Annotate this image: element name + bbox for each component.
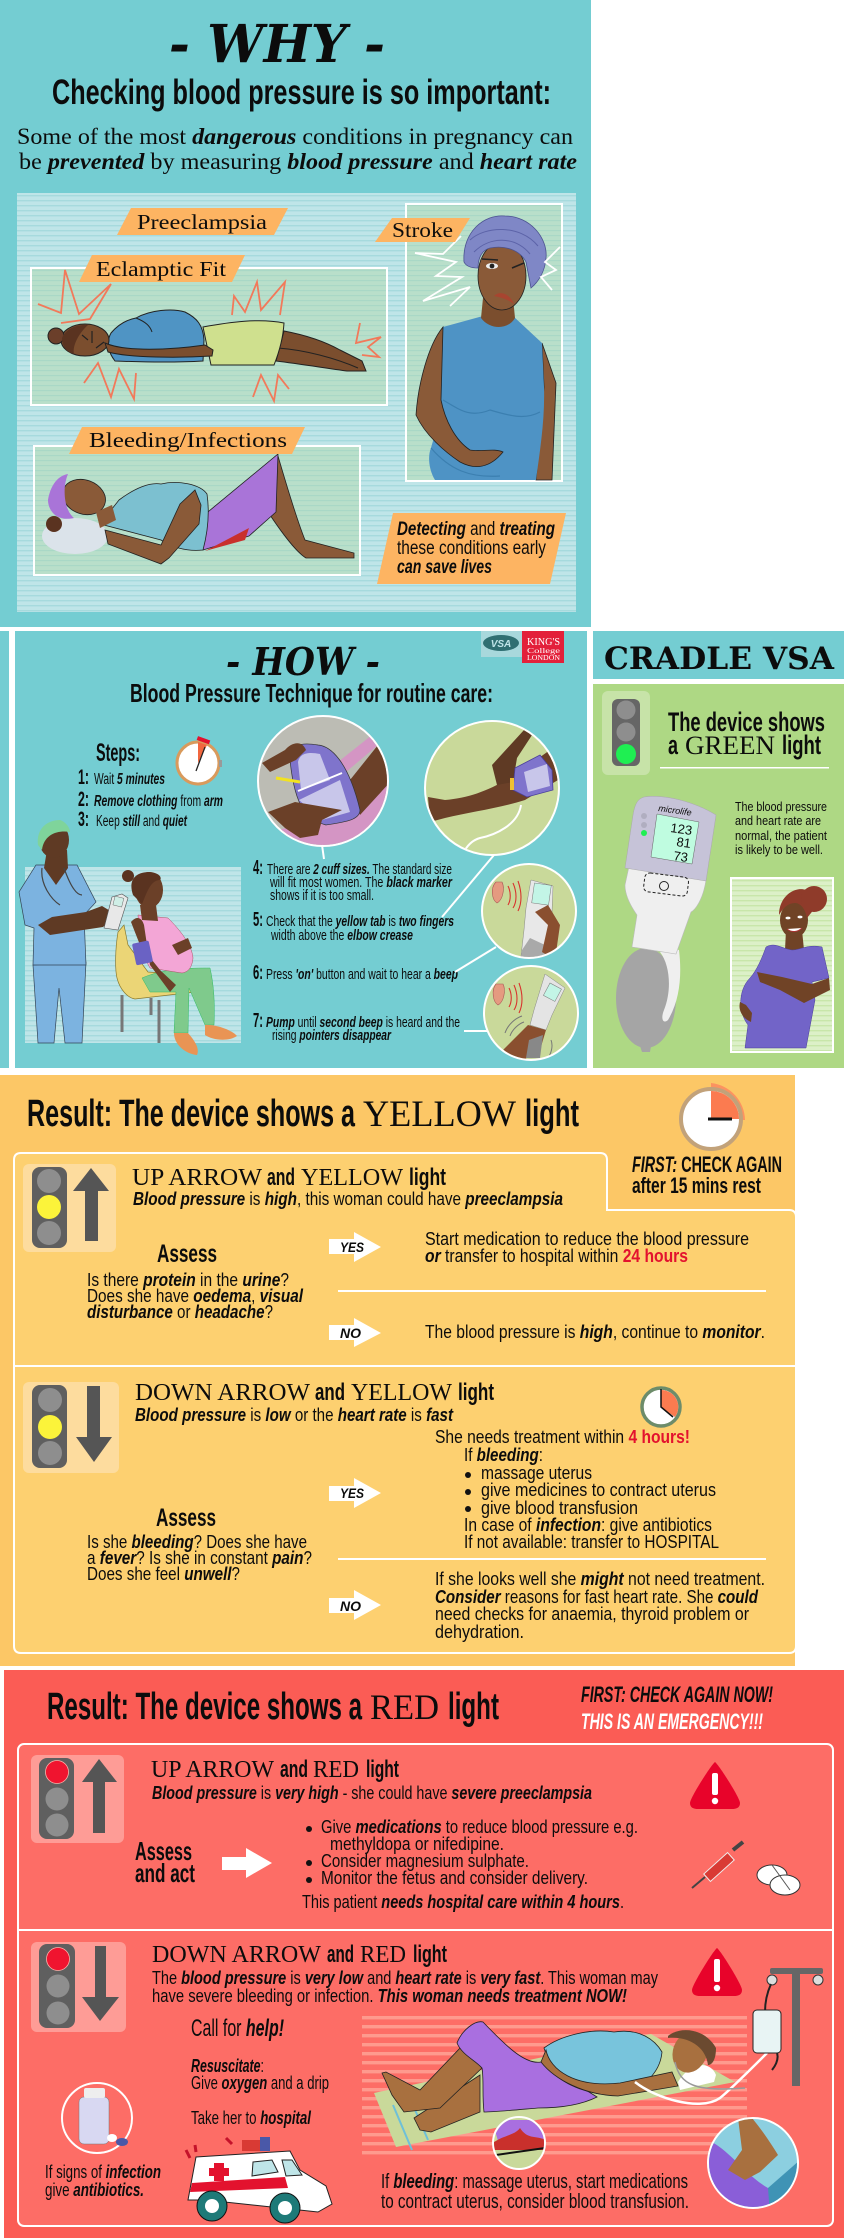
callout: check again bbox=[632, 1152, 782, 1198]
figure: woman bleeding bbox=[42, 454, 354, 564]
steps 4 to 7: 6: bbox=[253, 962, 263, 984]
text: if she looks well: If she looks well she might not need treatment. bbox=[435, 1569, 765, 1589]
circle: bleeding detail bbox=[492, 2117, 546, 2169]
figure: woman with oxygen and drip bbox=[374, 2022, 767, 2150]
steps 1 to 3 bbox=[78, 766, 223, 831]
heading: green light: light bbox=[782, 730, 821, 760]
circle: antibiotics bottle bbox=[62, 2083, 132, 2153]
heading: up arrow and red light: light bbox=[366, 1756, 399, 1783]
header: cradle vsa: CRADLE VSA bbox=[604, 641, 835, 677]
zaps bbox=[38, 270, 381, 401]
label: eclamptic fit bbox=[79, 255, 245, 282]
assess and act bbox=[135, 1836, 195, 1888]
heading: down arrow and red light: and bbox=[327, 1941, 354, 1968]
heading: up arrow and yellow light bbox=[132, 1164, 446, 1191]
section: up arrow red bbox=[31, 1755, 800, 1912]
text: treatment list: give medicines to contract uterus bbox=[481, 1480, 716, 1500]
circle: press on button bbox=[482, 864, 576, 965]
icon: 4 hour clock bbox=[642, 1388, 680, 1426]
steps 4 to 7: shows if it is too small. bbox=[270, 887, 374, 904]
intro text: Some of the most dangerous conditions in pregnancy can bbox=[17, 124, 574, 149]
text: action list: Consider magnesium sulphate. bbox=[321, 1851, 529, 1871]
text: action list: Monitor the fetus and consider delivery. bbox=[321, 1868, 588, 1888]
pointer: step 4 bbox=[322, 845, 324, 859]
arrow: assess to action bbox=[222, 1848, 272, 1878]
icon: ambulance bbox=[186, 2137, 332, 2223]
heading: up arrow and yellow light: YELLOW bbox=[301, 1165, 403, 1191]
text: take to hospital: Take her to hospital bbox=[191, 2108, 312, 2128]
inner outline bbox=[18, 1744, 833, 2226]
callout: detecting and treating bbox=[377, 513, 566, 584]
icon: warning bbox=[690, 1762, 740, 1809]
assess and act: and act bbox=[135, 1858, 195, 1888]
icon: monitor in nurse hand bbox=[104, 894, 128, 930]
icon: up arrow yellow light bbox=[23, 1164, 116, 1252]
label: preeclampsia: Preeclampsia bbox=[137, 210, 268, 234]
logo: vsa bbox=[481, 631, 522, 657]
text: action list: methyldopa or nifedipine. bbox=[330, 1834, 504, 1854]
heading: up arrow and yellow light: light bbox=[409, 1164, 446, 1191]
assess block: Assess bbox=[156, 1504, 216, 1532]
text: resuscitate: Resuscitate: bbox=[191, 2056, 264, 2076]
figure: nurse bbox=[19, 820, 117, 1043]
steps 4 to 7: 7: bbox=[253, 1010, 263, 1032]
callout: emergency bbox=[581, 1682, 773, 1734]
text: if she looks well: dehydration. bbox=[435, 1622, 524, 1642]
assess and act: Assess bbox=[135, 1836, 192, 1866]
subtitle: how: Blood Pressure Technique for routine care: bbox=[130, 678, 493, 708]
callout: detecting and treating: these conditions early bbox=[397, 538, 546, 559]
text: green light meaning: normal, the patient bbox=[735, 829, 827, 843]
assess block: a fever? Is she in constant pain? bbox=[87, 1548, 312, 1568]
callout: check again: after 15 mins rest bbox=[632, 1173, 761, 1198]
panel: how bbox=[15, 631, 587, 1068]
assess block: Does she have oedema, visual bbox=[87, 1286, 304, 1306]
steps 4 to 7: Press 'on' button and wait to hear a beep bbox=[266, 966, 458, 983]
label: bleeding/infections bbox=[69, 427, 305, 454]
steps 4 to 7: Pump until second beep is heard and the bbox=[266, 1014, 460, 1031]
pointer: step 7 bbox=[464, 1030, 488, 1032]
label: preeclampsia bbox=[117, 208, 288, 235]
heading: up arrow and red light bbox=[151, 1756, 399, 1783]
icon: down arrow red light bbox=[31, 1942, 126, 2032]
steps 4 to 7: 5: bbox=[253, 909, 263, 931]
text: antibiotics: give antibiotics. bbox=[45, 2180, 144, 2200]
heading: up arrow and red light: and bbox=[280, 1756, 308, 1783]
logo: kings college london bbox=[522, 631, 564, 663]
steps 4 to 7: Check that the yellow tab is two fingers bbox=[266, 913, 454, 930]
callout: check again: FIRST: CHECK AGAIN bbox=[632, 1152, 782, 1177]
arrow: no bbox=[329, 1318, 381, 1347]
intro text bbox=[17, 124, 577, 174]
assess block: disturbance or headache? bbox=[87, 1302, 273, 1322]
heading: red result: Result: The device shows a bbox=[47, 1686, 363, 1728]
steps 4 to 7: width above the elbow crease bbox=[270, 927, 413, 944]
section: up arrow yellow bbox=[23, 1164, 766, 1347]
arrow: yes bbox=[329, 1232, 381, 1262]
text: green light meaning: is likely to be well. bbox=[735, 843, 823, 857]
text: green light meaning bbox=[735, 800, 827, 857]
logo: kings college london: KING'S bbox=[527, 636, 560, 648]
heading: up arrow and red light: RED bbox=[313, 1757, 359, 1783]
frame: well woman bbox=[731, 878, 833, 1052]
device: blood pressure monitor: 123 bbox=[670, 820, 693, 838]
heading: up arrow and yellow light: UP ARROW bbox=[132, 1165, 262, 1191]
icon: warning bbox=[692, 1948, 742, 1996]
text: very high: Blood pressure is very high - she could have severe preeclampsia bbox=[152, 1783, 592, 1803]
heading: yellow result: light bbox=[525, 1093, 579, 1135]
heading: up arrow and yellow light: and bbox=[267, 1164, 295, 1191]
heading: down arrow and yellow light: light bbox=[458, 1379, 494, 1406]
text: very low bbox=[152, 1968, 658, 2006]
text: treatment list: give blood transfusion bbox=[481, 1498, 638, 1518]
assess block bbox=[87, 1504, 312, 1584]
text: treatment list: She needs treatment within 4 hours! bbox=[435, 1427, 690, 1447]
heading: yellow result: Result: The device shows a bbox=[27, 1093, 356, 1135]
text: yes action: Start medication to reduce the blood pressure bbox=[425, 1229, 749, 1249]
logo: kings college london: College bbox=[527, 647, 560, 655]
figure: patient on chair bbox=[116, 870, 237, 1055]
subtitle: why: Checking blood pressure is so important: bbox=[52, 73, 551, 112]
label: eclamptic fit: Eclamptic Fit bbox=[96, 257, 226, 281]
arrow: yes: YES bbox=[340, 1485, 365, 1501]
text: antibiotics: If signs of infection bbox=[45, 2162, 161, 2182]
heading: down arrow and red light: light bbox=[413, 1941, 447, 1968]
text: treatment list: If bleeding: bbox=[464, 1445, 543, 1465]
panel: red result bbox=[4, 1670, 844, 2238]
text: call for help: Call for help! bbox=[191, 2015, 284, 2042]
assess block: Is she bleeding? Does she have bbox=[87, 1532, 307, 1552]
logo: kings college london: LONDON bbox=[527, 654, 560, 662]
assess block: Assess bbox=[157, 1240, 217, 1268]
arrow: no bbox=[329, 1590, 381, 1620]
assess block bbox=[87, 1240, 304, 1322]
heading: down arrow and red light: DOWN ARROW bbox=[152, 1942, 321, 1968]
text: action list: Give medications to reduce blood pressure e.g. bbox=[321, 1817, 638, 1837]
section: down arrow yellow bbox=[23, 1379, 766, 1642]
text: green light meaning: and heart rate are bbox=[735, 814, 821, 828]
arrow: yes bbox=[329, 1478, 381, 1508]
steps 4 to 7: rising pointers disappear bbox=[272, 1027, 392, 1044]
pointer: step 5 bbox=[442, 855, 494, 917]
steps 1 to 3: 1: bbox=[78, 766, 89, 789]
heading: green light: GREEN bbox=[685, 731, 775, 760]
text: very low: The blood pressure is very low and heart rate is very fast. This woman may bbox=[152, 1968, 658, 1988]
text: yes action: or transfer to hospital within 24 hours bbox=[425, 1246, 688, 1266]
heading: down arrow and red light: RED bbox=[360, 1942, 406, 1968]
inner outline bbox=[14, 1153, 796, 1653]
label: stroke: Stroke bbox=[392, 218, 453, 242]
text: blood pressure high: Blood pressure is high, this woman could have preeclampsia bbox=[133, 1189, 563, 1209]
heading: down arrow and yellow light: DOWN ARROW bbox=[135, 1380, 310, 1406]
heading: up arrow and red light: UP ARROW bbox=[151, 1757, 274, 1783]
frame: eclamptic fit bbox=[31, 268, 387, 405]
text: treatment list bbox=[435, 1427, 719, 1552]
device: blood pressure monitor: microlife bbox=[658, 803, 692, 818]
text: action list bbox=[302, 1817, 638, 1912]
text: if she looks well bbox=[435, 1569, 765, 1642]
arrow: no: NO bbox=[340, 1598, 361, 1614]
arrow: yes: YES bbox=[340, 1239, 365, 1255]
assess block: Does she feel unwell? bbox=[87, 1564, 240, 1584]
assess block: Is there protein in the urine? bbox=[87, 1270, 289, 1290]
panel: yellow result bbox=[0, 1075, 796, 1666]
text: if she looks well: Consider reasons for fast heart rate. She could bbox=[435, 1587, 759, 1607]
heading: yellow result: YELLOW bbox=[363, 1094, 516, 1135]
text: if bleeding: If bleeding: massage uterus, start medications bbox=[381, 2171, 688, 2193]
striped backdrop bbox=[362, 2015, 747, 2155]
circle: cuff position bbox=[425, 721, 559, 855]
text: blood pressure low: Blood pressure is low or the heart rate is fast bbox=[135, 1405, 454, 1425]
heading: down arrow and yellow light: and bbox=[315, 1379, 345, 1406]
heading: down arrow and yellow light bbox=[135, 1379, 494, 1406]
circle: uterine massage bbox=[707, 2117, 799, 2209]
text: very low: have severe bleeding or infection. This woman needs treatment NOW! bbox=[152, 1986, 627, 2006]
steps 4 to 7: There are 2 cuff sizes. The standard size bbox=[267, 861, 452, 878]
text: antibiotics bbox=[45, 2162, 161, 2200]
title: why: - WHY - bbox=[169, 14, 385, 75]
frame: bleeding bbox=[34, 446, 360, 575]
icon: up arrow red light bbox=[31, 1755, 124, 1843]
circle: cuff sizes bbox=[257, 715, 389, 847]
steps heading: Steps: bbox=[96, 739, 140, 767]
intro text: be prevented by measuring blood pressure and heart rate bbox=[19, 149, 577, 174]
arrow: no: NO bbox=[340, 1325, 361, 1341]
text: if bleeding bbox=[381, 2171, 689, 2213]
steps 1 to 3: 3: bbox=[78, 808, 89, 831]
steps 1 to 3: 2: bbox=[78, 788, 89, 811]
striped backdrop bbox=[25, 867, 241, 1043]
steps 1 to 3: Wait 5 minutes bbox=[94, 771, 165, 788]
logo: vsa: VSA bbox=[491, 639, 511, 650]
pointer: step 6 bbox=[455, 947, 496, 972]
figure: woman having fit bbox=[48, 310, 366, 371]
device: blood pressure monitor: 73 bbox=[673, 848, 689, 865]
header: cradle vsa bbox=[593, 631, 844, 679]
heading: green light bbox=[660, 707, 829, 768]
icon: syringe and pills bbox=[692, 1842, 800, 1895]
label: stroke bbox=[375, 218, 470, 242]
heading: green light: a bbox=[668, 730, 679, 760]
title: how: - HOW - bbox=[226, 639, 380, 684]
text: if she looks well: need checks for anaemia, thyroid problem or bbox=[435, 1604, 749, 1624]
text: treatment list: In case of infection: give antibiotics bbox=[464, 1515, 712, 1535]
panel: conditions bbox=[17, 193, 576, 612]
strip: left edge bbox=[0, 631, 9, 1068]
steps 4 to 7: 4: bbox=[253, 857, 263, 879]
panel: green light bbox=[593, 684, 844, 1068]
icon: stopwatch bbox=[177, 736, 222, 784]
text: action list: This patient needs hospital care within 4 hours. bbox=[302, 1892, 624, 1912]
text: if bleeding: to contract uterus, consider blood transfusion. bbox=[381, 2191, 689, 2213]
text: green light meaning: The blood pressure bbox=[735, 800, 827, 814]
heading: red result: light bbox=[448, 1686, 499, 1728]
steps 1 to 3: Remove clothing from arm bbox=[94, 793, 223, 810]
heading: red result: RED bbox=[370, 1687, 439, 1727]
text: treatment list: If not available: transfer to HOSPITAL bbox=[464, 1532, 719, 1552]
device: blood pressure monitor bbox=[616, 796, 716, 1052]
text: yes action bbox=[425, 1229, 749, 1266]
text: resuscitate bbox=[191, 2056, 329, 2093]
text: treatment list: massage uterus bbox=[481, 1463, 592, 1483]
icon: down arrow yellow light bbox=[23, 1382, 119, 1473]
heading: down arrow and yellow light: YELLOW bbox=[351, 1380, 452, 1406]
figure: woman with stroke bbox=[415, 216, 560, 480]
text: resuscitate: Give oxygen and a drip bbox=[191, 2073, 329, 2093]
callout: detecting and treating: can save lives bbox=[397, 557, 492, 578]
steps 4 to 7: will fit most women. The black marker bbox=[269, 874, 453, 891]
steps 4 to 7 bbox=[253, 857, 460, 1044]
figure: well pregnant woman bbox=[739, 886, 830, 1048]
label: bleeding/infections: Bleeding/Infections bbox=[89, 428, 287, 452]
icon: 15 minute timer bbox=[681, 1083, 745, 1149]
icon: drip stand bbox=[753, 1968, 823, 2086]
text: no action: The blood pressure is high, continue to monitor. bbox=[425, 1322, 765, 1342]
callout: detecting and treating: Detecting and treating bbox=[397, 519, 555, 540]
device: blood pressure monitor: 81 bbox=[676, 834, 692, 851]
steps 1 to 3: Keep still and quiet bbox=[96, 813, 188, 830]
panel: why bbox=[0, 0, 591, 627]
icon: green traffic light bbox=[602, 691, 650, 775]
section: down arrow red bbox=[31, 1941, 823, 2225]
frame: stroke bbox=[406, 204, 562, 481]
circle: pump until beep bbox=[484, 966, 578, 1062]
heading: down arrow and red light bbox=[152, 1941, 447, 1968]
